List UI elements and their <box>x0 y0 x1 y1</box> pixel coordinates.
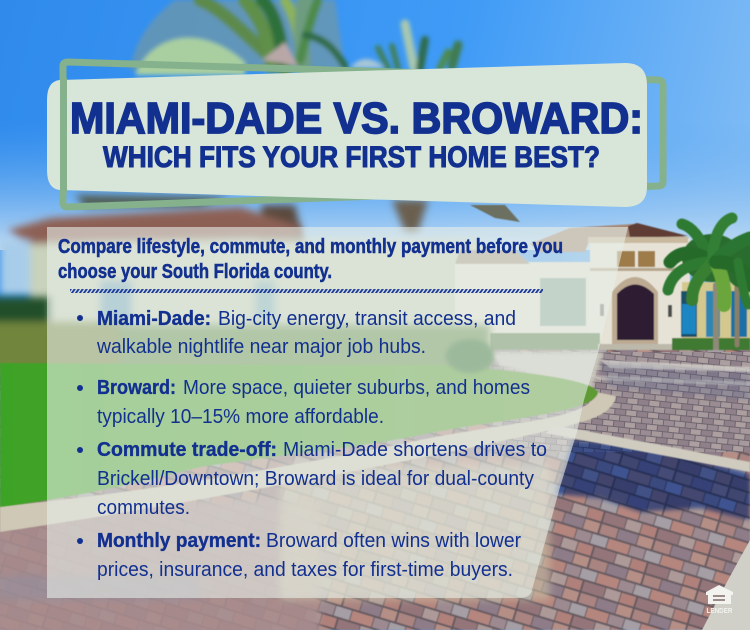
intro text <box>58 236 563 283</box>
bullet: Broward: Broward: <box>97 377 176 399</box>
bullet: Miami-Dade: Big-city energy, transit access, and <box>218 308 516 330</box>
lawn <box>0 363 598 507</box>
bullet: Monthly payment: Broward often wins with lower <box>266 530 521 552</box>
bullet: Commute trade-off: Commute trade-off: <box>97 439 277 461</box>
bullet: Miami-Dade: walkable nightlife near major job hubs. <box>96 336 426 358</box>
bullet: Commute trade-off: Miami-Dade shortens drives to <box>283 439 547 461</box>
icon: equal housing lender <box>706 585 733 615</box>
bullet: Miami-Dade <box>77 308 516 358</box>
bullet: Monthly payment: Monthly payment: <box>97 530 261 552</box>
right palm tree <box>668 218 750 354</box>
driveway pavers <box>0 350 750 630</box>
shrub by the lawn <box>446 339 494 373</box>
curb bands <box>0 392 616 532</box>
driveway pale area near the entry <box>488 352 604 392</box>
bullet: Commute trade-off: commutes. <box>97 497 190 519</box>
icon: equal housing lender: LENDER <box>706 608 732 615</box>
bullet: Commute trade-off <box>77 439 547 519</box>
title: MIAMI-DADE VS. BROWARD: <box>70 94 643 143</box>
bullet: Monthly payment: prices, insurance, and taxes for first-time buyers. <box>97 559 513 581</box>
title banner: left outline bar <box>60 78 67 193</box>
blurred left house <box>0 207 480 355</box>
title banner: green outline <box>63 62 663 207</box>
bullet: Broward: typically 10–15% more affordable. <box>97 406 384 428</box>
paver shadows <box>555 440 750 520</box>
hatched divider <box>70 289 543 293</box>
right house <box>455 223 750 356</box>
right side walkway <box>702 540 750 630</box>
title <box>70 94 643 174</box>
blurred tree trunks <box>75 195 428 250</box>
bullet: Broward: More space, quieter suburbs, and homes <box>183 377 530 399</box>
shrubs behind the lawn <box>0 297 490 373</box>
intro text: Compare lifestyle, commute, and monthly payment before you <box>58 236 563 258</box>
bullet: Miami-Dade: Miami-Dade: <box>97 308 211 330</box>
bullet: Broward <box>77 377 530 428</box>
blurred lower-left pavers <box>0 500 320 630</box>
translucent content panel <box>47 227 628 598</box>
intro text: choose your South Florida county. <box>58 261 332 283</box>
blurred palm trees <box>130 0 458 75</box>
bullet: Commute trade-off: Brickell/Downtown; Broward is ideal for dual-county <box>97 468 534 490</box>
title: WHICH FITS YOUR FIRST HOME BEST? <box>103 141 600 174</box>
bullet: Monthly payment <box>77 530 521 581</box>
title banner: pale panel <box>47 63 647 207</box>
